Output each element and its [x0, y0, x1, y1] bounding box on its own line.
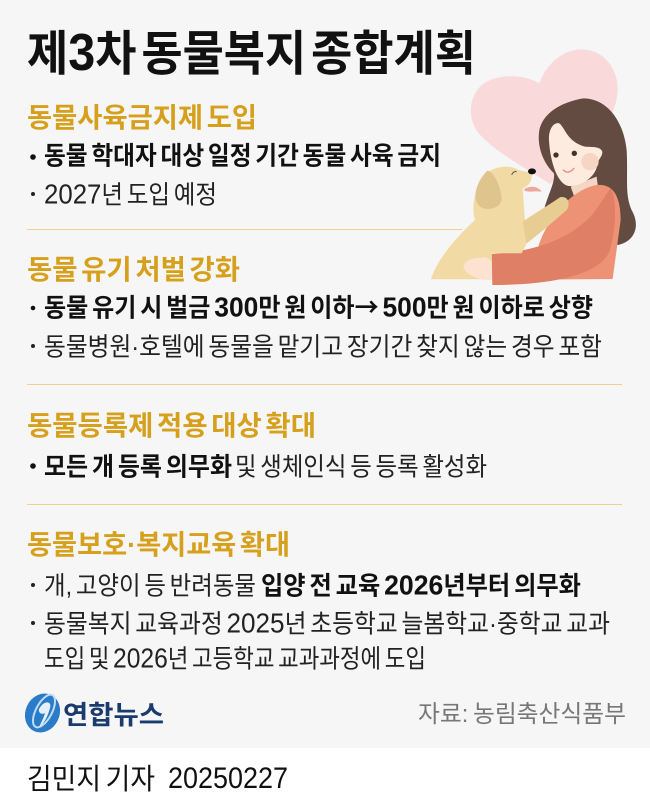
logo: Yonhap News — [19, 688, 164, 738]
bullet 1: 개, 고양이 등 반려동물 — [44, 572, 256, 600]
bullet 1: 동물 학대자 대상 일정 기간 동물 사육 금지 — [44, 142, 441, 170]
logo: Yonhap News: 연합뉴스 — [63, 700, 164, 730]
bullet: 및 생체인식 등 등록 활성화 — [235, 454, 487, 482]
section: protection and welfare education — [27, 529, 610, 674]
bullet — [30, 454, 487, 482]
illustration: woman hugging dog with heart — [431, 49, 636, 285]
byline and date: 20250227 — [168, 762, 288, 795]
heading: 동물 유기 처벌 강화 — [27, 254, 240, 285]
bullet 2: 동물병원·호텔에 동물을 맡기고 장기간 찾지 않는 경우 포함 — [44, 334, 602, 362]
bullet 1: 동물 유기 시 벌금 300만 원 이하→ 500만 원 이하로 상향 — [44, 288, 593, 324]
byline and date — [27, 762, 288, 796]
icon: globe mark — [19, 688, 66, 738]
byline and date: 김민지 기자 — [27, 763, 155, 796]
section: stronger abandonment penalties — [27, 254, 602, 362]
bullet 2: 도입 및 2026년 고등학교 교과과정에 도입 — [44, 642, 426, 674]
heading: 동물보호·복지교육 확대 — [27, 529, 290, 560]
source: 자료: 농림축산식품부 — [418, 701, 626, 728]
section: animal ownership ban — [27, 102, 441, 210]
bullet 2: 동물복지 교육과정 2025년 초등학교 늘봄학교·중학교 교과 — [44, 608, 610, 638]
bullet 1: 입양 전 교육 2026년부터 의무화 — [261, 570, 581, 600]
bullet 2: 2027년 도입 예정 — [44, 178, 217, 210]
bullet 2 — [31, 608, 610, 674]
heading: 동물사육금지제 도입 — [27, 102, 257, 133]
bullet 1 — [31, 570, 581, 600]
bullet: 모든 개 등록 의무화 — [44, 454, 232, 482]
heading: 동물등록제 적용 대상 확대 — [27, 410, 316, 441]
section: animal registration expansion — [27, 410, 487, 482]
title: 제3차 동물복지 종합계획 — [27, 24, 476, 82]
